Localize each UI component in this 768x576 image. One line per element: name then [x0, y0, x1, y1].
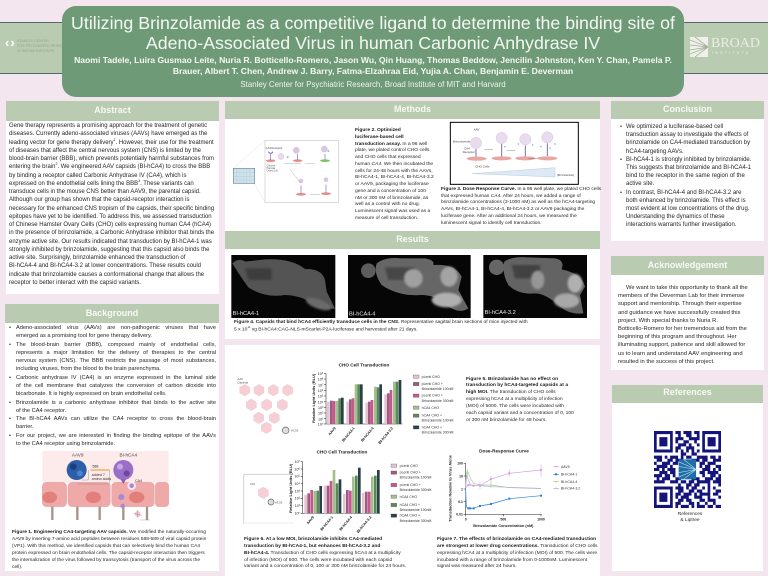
figure 6: capsid illustration and bar chart: 10⁷ — [295, 460, 301, 464]
brain BI-hCA4-1 — [231, 255, 335, 318]
category labels: BI-hCA4-4 — [339, 515, 354, 532]
figure 6: capsid illustration and bar chart: 10² — [295, 497, 301, 501]
heading: results: Results — [396, 234, 429, 244]
logo: Stanley Center: AT BROAD INSTITUTE — [17, 49, 55, 53]
figure 2 caption: Luminescent signal was used as a — [355, 209, 430, 214]
title: Adeno-Associated Virus in human Carbonic Anhydrase IV — [146, 33, 600, 53]
figure 3: dose response schematic — [450, 122, 578, 184]
legend: AAV9 — [561, 465, 570, 469]
legend: hCA4 CHO — [400, 495, 417, 499]
legend: pLenti CHO — [422, 375, 440, 379]
category labels: BI-hCA4-3.2 — [356, 515, 372, 534]
figure 5 caption: high MOI. The transduction of CHO cells — [466, 390, 556, 395]
logo: Broad Institute: BROAD — [711, 36, 760, 51]
figure 6: capsid illustration and bar chart: 10¹ — [295, 504, 301, 508]
series: BI-hCA4-3.2 — [466, 475, 541, 488]
axis — [301, 462, 380, 513]
figure 4 caption: Figure 4. Capsids that bind hCA4 efficiently transduce cells in the CNS. Representative sagittal brain sections of mice injected with — [234, 320, 528, 325]
abstract text: diseases. Currently adeno-associated viruses (AAVs) have emerged as the — [9, 131, 207, 137]
figure 5: capsid illustration and bar chart: 10⁶ — [318, 389, 324, 393]
figure 3 caption: luciferase gene. After an additional 24 hours, we measured the — [441, 214, 577, 219]
figure 1 caption: the internalization of the virus followed by transcytosis (transport of the virus across the — [12, 558, 200, 563]
peptide insertion label: 588 — [92, 465, 98, 469]
logo: Stanley Center — [5, 35, 70, 53]
title — [71, 13, 675, 53]
category labels: BI-hCA4-4 — [360, 426, 375, 443]
conclusion bullets: both enhanced by brinzolamide. This effect is — [626, 198, 746, 204]
figure 5: capsid illustration and bar chart: HCO5 — [291, 429, 299, 433]
references label: References — [678, 512, 702, 517]
background bullets: nervous system (CNS). The BBB restricts the passage of most substances, — [16, 358, 216, 364]
references label — [678, 512, 702, 523]
panel: results charts — [225, 345, 600, 576]
background bullets: Adeno-associated virus (AAVs) are non-pathogenic viruses that have — [16, 325, 216, 331]
conclusion bullets: brinzolamide on CA4-mediated transduction by — [626, 140, 750, 146]
authors: Brauer, Albert T. Chen, Andrew J. Barry, Fatma-Elzahraa Eid, Yujia A. Chan, Benjamin E. Deverman — [173, 66, 573, 76]
figure 5: capsid illustration and bar chart — [237, 362, 454, 445]
figure 1 caption: cell). — [12, 565, 22, 570]
category labels: AAV9 — [306, 515, 315, 525]
acknowledgement text — [618, 285, 748, 365]
background bullets: • — [9, 325, 11, 331]
heading: conclusion: Conclusion — [663, 104, 712, 114]
legend — [553, 465, 580, 491]
logo: Broad Institute — [690, 36, 760, 57]
panel: abstract — [6, 101, 219, 294]
legend: Brinzolamide 100nM — [422, 387, 454, 391]
axes — [464, 463, 542, 516]
category labels: BI-hCA4-1 — [341, 426, 356, 443]
figure 6: capsid illustration and bar chart — [244, 450, 432, 534]
legend: Brinzolamide 100nM — [400, 476, 432, 480]
axis — [324, 373, 402, 424]
panel: references — [612, 385, 763, 571]
figure 7: dose response chart: 1000 — [537, 518, 545, 522]
figure 3: dose response schematic: Brinzolamide — [453, 140, 471, 144]
vesicles and neuron: CA4 — [135, 479, 142, 483]
abstract text: necessary for the enhanced CNS tropism of the capsids, their specific binding — [9, 206, 214, 212]
heading: background — [5, 304, 219, 323]
panel: results top — [225, 231, 600, 339]
figure 2 caption: Figure 2. Optimized — [355, 128, 401, 133]
acknowledgement text: Botticello-Romero for her tremendous aid from the — [618, 326, 747, 332]
heading: methods: Methods — [394, 104, 431, 114]
figure 2 caption: BI-hCA4-1, BI-hCA4-4, BI-hCA4-3.2 — [355, 175, 434, 180]
legend: pLenti CHO + — [400, 483, 421, 487]
figure 5 caption — [466, 376, 574, 423]
legend: Brinzolamide 300nM — [422, 431, 454, 435]
acknowledgement text: us to learn and understand AAV engineering and — [618, 351, 743, 357]
figure 2 caption: cells for 24-48 hours with the AAVs, — [355, 168, 433, 174]
references label: & Liptree — [680, 518, 700, 523]
figure 2 caption: human CA4. We then incubated the — [355, 162, 433, 167]
endothelial cells — [42, 482, 169, 520]
peptide insertion label — [78, 465, 111, 484]
series: BI-hCA4-4 — [466, 469, 541, 489]
bars — [327, 380, 401, 424]
background bullets: represents a major limitation for the delivery of therapies to the central — [16, 350, 216, 356]
figure 7 caption: are strongest at lower drug concentrations. Transduction of CHO cells — [437, 544, 598, 549]
legend: hCA4 CHO + — [400, 503, 420, 507]
background bullets: The BI-hCA4 AAVs can utilize the CA4 receptor to cross the blood-brain — [16, 416, 216, 422]
figure 4 caption — [234, 320, 528, 333]
figure 7: dose response chart: 500 — [500, 518, 506, 522]
figure 5 caption: or 300 nM brinzolamide for 48 hours. — [466, 418, 547, 423]
figure 7 caption: Figure 7. The effects of brinzolamide on CA4-mediated transduction — [437, 537, 596, 542]
abstract text: transduce cells in the mouse CNS better than AAV9, the parental capsid. — [9, 189, 201, 195]
figure 5: capsid illustration and bar chart: 10⁸ — [318, 378, 324, 382]
figure 6: capsid illustration and bar chart: 10⁵ — [294, 475, 300, 479]
affiliation: Stanley Center for Psychiatric Research, Broad Institute of MIT and Harvard — [240, 80, 506, 89]
panel: conclusion — [611, 101, 764, 241]
figure 2 caption: well as a control with no drug. — [355, 202, 420, 207]
figure 3: dose response schematic: [Brinzolamide] — [557, 173, 574, 177]
figure 5: capsid illustration and bar chart: 10⁰ — [318, 422, 324, 426]
chart title: CHO Cell Transduction — [339, 362, 390, 367]
brain BI-hCA4-3.2 — [483, 255, 587, 318]
abstract text: Although our group has shown that the capsid-receptor interaction is — [9, 197, 190, 203]
figure 2 caption: nM or 300 nM of brinzolamide, as — [355, 196, 428, 200]
chart title: CHO Cell Transduction — [317, 450, 368, 455]
background bullets: bicarbonate. It is highly expressed on brain endothelial cells. — [16, 391, 167, 397]
capsid hexagons — [240, 384, 293, 434]
figure 5: capsid illustration and bar chart: 10³ — [318, 406, 324, 410]
figure 7 caption: signal was measured after 24 hours. — [437, 564, 517, 569]
peptide insertion label: amino acids — [92, 477, 111, 481]
legend: hCA4 CHO — [422, 406, 439, 410]
legend: pLenti CHO + — [422, 382, 443, 386]
capsid: BI-hCA4: BI-hCA4 — [120, 453, 138, 458]
figure 6 caption: transduction by BI-hCA4-1, but enhances BI-hCA4-3.2 and — [244, 544, 380, 549]
figure 2 caption: gene and a concentration of 100 — [355, 189, 426, 194]
figure 7 caption: incubated with a range of brinzolamide from 0-1000nM. Luminescent — [437, 558, 587, 563]
figure 5: capsid illustration and bar chart: Capsids — [237, 380, 249, 384]
figure 7 caption — [437, 536, 598, 569]
brain BI-hCA4-1: BI-hCA4-1 — [233, 311, 259, 317]
figure 5: capsid illustration and bar chart: 10¹ — [318, 417, 324, 421]
figure 5: capsid illustration and bar chart: 10⁷ — [318, 383, 324, 387]
figure 1 caption: (VP1). With this method, we identified capsids that can selectively bind the human CA4 — [12, 544, 200, 549]
brain BI-hCA4-4: BI-hCA4-4 — [349, 311, 375, 317]
background bullets: of the cell membrane that catalyzes the conversion of carbon dioxide into — [16, 383, 216, 389]
background bullets: Brinzolamide is a carbonic anhydrase inhibitor that binds to the active site — [16, 400, 216, 406]
logo: Stanley Center: STANLEY CENTER — [17, 39, 49, 43]
background bullets: • — [9, 400, 11, 406]
figure 1 caption: Figure 1. Engineering CA4-targeting AAV capsids. We modified the naturally-occurring — [12, 530, 206, 535]
figure 3 caption: AAVs, BI-hCA4-1, BI-hCA4-4, BI-hCA4-3.2 or AAV9 packaging the — [441, 207, 584, 212]
abstract text: enzyme active site. Our results indicated that transduction by BI-hCA4-1 was — [9, 238, 212, 244]
acknowledgement text: and guidance we have successfully created this — [618, 310, 740, 316]
figure 2: luciferase assay schematic: Hamster — [267, 167, 276, 170]
conclusion bullets: hCA4-targeting AAVs. — [626, 149, 684, 155]
conclusion bullets: BI-hCA4-1 is strongly inhibited by brinzolamide. — [626, 157, 751, 163]
figure 2: luciferase assay schematic: Chinese — [267, 165, 276, 167]
title: Utilizing Brinzolamide as a competitive ligand to determine the binding site of — [71, 13, 675, 33]
legend — [413, 375, 454, 435]
series: AAV9 — [466, 464, 542, 489]
abstract text: indicate that brinzolamide causes a conformational change that allows the — [9, 272, 204, 278]
acknowledgement text: support and mentorship. Through their expertise — [618, 301, 742, 307]
figure 5: capsid illustration and bar chart: Relative Light Units (RLU) — [311, 373, 316, 423]
figure 3 caption: luminescent signal to identify cell transduction. — [441, 221, 542, 226]
figure 7: dose response chart — [449, 448, 580, 528]
figure 5: capsid illustration and bar chart: 10⁵ — [318, 395, 324, 399]
acknowledgement text: members of the Deverman Lab for their immense — [618, 293, 744, 299]
figure 6: capsid illustration and bar chart: 10⁴ — [294, 482, 300, 486]
QR centre logo — [679, 459, 696, 479]
legend: Brinzolamide 300nM — [422, 399, 454, 403]
background bullets: • — [9, 342, 11, 348]
legend: pLenti CHO — [400, 464, 418, 468]
category labels: BI-hCA4-1 — [320, 515, 334, 532]
figure 6: capsid illustration and bar chart: 10³ — [295, 489, 301, 493]
conclusion bullets: This suggests that brinzolamide and BI-hCA4-1 — [626, 165, 751, 171]
figure 5 caption: transduction by hCA4-targeted capsids at a — [466, 383, 568, 388]
category labels: BI-hCA4-3.2 — [378, 426, 394, 445]
heading: results — [225, 231, 600, 249]
legend: Brinzolamide 300nM — [400, 488, 432, 492]
logo: Stanley Center: FOR PSYCHIATRIC RESEARCH — [17, 44, 70, 48]
brain BI-hCA4-3.2: BI-hCA4-3.2 — [485, 310, 516, 316]
conclusion bullets: We optimized a luciferase-based cell — [626, 124, 723, 130]
figure 5 caption: each capsid variant and a concentration of 0, 100 — [466, 411, 574, 416]
figure 5: capsid illustration and bar chart: AAV — [237, 377, 243, 381]
title banner — [62, 6, 684, 97]
background bullets: to the CA4 receptor using brinzolamide. — [16, 441, 115, 447]
heading: conclusion — [611, 101, 764, 119]
background bullets — [9, 325, 216, 447]
well illustration — [244, 474, 293, 523]
category labels: AAV9 — [328, 426, 337, 436]
figure 5: capsid illustration and bar chart: 10⁴ — [318, 400, 324, 404]
figure 7: dose response chart: 1 — [461, 487, 463, 491]
conclusion bullets: Understanding the dynamics of these — [626, 214, 725, 220]
figure 5 caption: expressing hCA4 at a multiplicity of infection — [466, 397, 563, 402]
abstract text: of diseases that affect the central nervous system (CNS) is limited by the — [9, 148, 201, 154]
figure 1 caption — [12, 530, 206, 570]
legend: hCA4 CHO + — [400, 514, 420, 518]
authors — [74, 55, 672, 76]
legend: BI-hCA4-3.2 — [561, 487, 580, 491]
acknowledgement text: beginning of this program and throughout. Her — [618, 334, 737, 340]
figure 1: capsid diagram — [42, 451, 169, 520]
background bullets: barrier. — [16, 424, 34, 430]
acknowledgement text: We want to take this opportunity to thank all the — [626, 285, 748, 291]
figure 7: dose response chart: 100 — [457, 462, 463, 466]
figure 2 caption — [355, 128, 434, 221]
legend: pLenti CHO + — [422, 394, 443, 398]
conclusion bullets — [626, 124, 751, 228]
abstract text: receptor to better interact with the capsid variants. — [9, 280, 141, 286]
panel: conclusion: • — [620, 190, 622, 196]
abstract text: in the presence of brinzolamide, a Carbonic Anhydrase inhibitor that binds the — [9, 230, 214, 236]
abstract text: leading vector for gene therapy delivery1. However, their use for the treatment — [9, 138, 214, 146]
logo: Stanley Center: ‹› — [5, 35, 16, 50]
figure 3 caption: brinzolamide concentrations (3-1000 nM) as well as the hCA4-targeting — [441, 200, 595, 205]
figure 7: dose response chart: Brinzolamide Concentration (nM) — [473, 524, 534, 528]
abstract text: epitopes have yet to be identified. To address this, we assessed transduction — [9, 214, 212, 220]
background bullets: of the CA4 receptor. — [16, 408, 66, 414]
panel: conclusion: • — [620, 157, 622, 163]
figure 6: capsid illustration and bar chart: Relative Light Units (RLU) — [288, 463, 293, 513]
background bullets: • — [9, 433, 11, 439]
figure 7: dose response chart: 0 — [465, 518, 467, 522]
panel: background — [5, 304, 219, 571]
panel: acknowledgement — [611, 256, 764, 370]
legend: BI-hCA4-4 — [561, 480, 577, 484]
legend: hCA4 CHO + — [422, 414, 442, 418]
background bullets: The blood-brain barrier (BBB), composed mainly of endothelial cells, — [16, 342, 216, 348]
figure 4 caption: 5 x 1011 vg BI-hCA4:CAG-NLS-mScarlet-P2A-luciferase and harvested after 21 days. — [234, 325, 418, 333]
category labels — [328, 426, 394, 445]
heading: references: References — [663, 387, 712, 397]
legend: BI-hCA4-1 — [561, 473, 577, 477]
figure 3: dose response schematic: AAV — [474, 128, 479, 132]
heading: abstract — [6, 101, 219, 121]
figure 6 caption: of infection (MOI) of 500. The cells were incubated with each capsid — [244, 558, 392, 563]
abstract text: Gene therapy represents a promising approach for the treatment of genetic — [9, 123, 207, 129]
bars — [304, 468, 380, 513]
legend: pLenti CHO + — [400, 471, 421, 475]
figure 2 caption: plate, we plated control CHO cells — [355, 148, 429, 153]
well illustration: AAV — [250, 482, 255, 486]
conclusion bullets: interactions warrants further investigation. — [626, 222, 736, 228]
figure 6 caption: Figure 6. At a low MOI, brinzolamide inhibits CA4-mediated — [244, 537, 382, 542]
series: BI-hCA4-1 — [466, 488, 542, 509]
legend — [391, 464, 432, 523]
abstract text — [9, 122, 214, 286]
figure 2 caption: measure of cell transduction. — [355, 216, 418, 221]
legend: Brinzolamide 100nM — [400, 508, 432, 512]
abstract text: BI-hCA4-4 and BI-hCA4-3.2 at lower concentrations. These results could — [9, 263, 201, 269]
figure 5: capsid illustration and bar chart: 10² — [318, 412, 324, 416]
conclusion bullets: active site. — [626, 181, 654, 187]
abstract text: blood-brain barrier (BBB), which prevents potentially harmful substances from — [9, 156, 214, 162]
figure 5 caption: Figure 5. Brinzolamide has no effect on — [466, 376, 558, 382]
figure 2: luciferase assay schematic — [233, 140, 338, 202]
figure 6: capsid illustration and bar chart: 10⁰ — [294, 512, 301, 516]
figure 4: brain sections — [231, 255, 587, 318]
figure 7 caption: expressing hCA4 at a multiplicity of infection (MOI) of 500. The cells were — [437, 551, 597, 556]
figure 6 caption: variant and a concentration of 0, 100 or 300 nM brinzolamide for 24 hours. — [244, 564, 406, 569]
figure 5: capsid illustration and bar chart: 10⁹ — [318, 372, 324, 376]
background bullets: emerged as a promising tool for gene therapy delivery. — [16, 333, 152, 339]
chart title: Dose-Response Curve — [479, 448, 529, 453]
legend: Brinzolamide 300nM — [400, 519, 432, 523]
figure 3 caption — [441, 186, 601, 226]
abstract text: of Chinese Hamster Ovary Cells (CHO) cells expressing human CA4 (hCA4) — [9, 222, 211, 228]
abstract text: active site. Surprisingly, brinzolamide enhanced the transduction of — [9, 255, 185, 261]
figure 1 caption: protein expressed on brain endothelial cells. The capsid-receptor interaction then triggers — [12, 551, 205, 556]
heading: background: Background — [86, 308, 138, 318]
figure 7: dose response chart: 10 — [459, 474, 463, 478]
heading: abstract: Abstract — [94, 105, 131, 115]
background bullets: • — [9, 375, 11, 381]
logo: Broad Institute: INSTITUTE — [712, 51, 751, 55]
panel: conclusion: • — [620, 124, 622, 130]
acknowledgement text: project. With special thanks to Nuria R. — [618, 318, 718, 324]
legend: hCA4 CHO + — [422, 425, 442, 429]
abstract text: entering the brain2. We engineered AAV capsids (BI-hCA4) to cross the BBB — [9, 162, 210, 170]
figure 2 caption: luciferase-based cell — [355, 135, 404, 140]
figure 3: dose response schematic: CHO Cells — [475, 164, 490, 168]
figure 3: dose response schematic: CA4 — [464, 146, 470, 150]
background bullets: • — [9, 416, 11, 422]
figure 2: luciferase assay schematic: CA4 Receptor — [266, 146, 282, 150]
heading: acknowledgement: Acknowledgement — [648, 260, 727, 270]
category labels — [306, 515, 372, 534]
figure 7: dose response chart: 0.01 — [456, 513, 463, 517]
conclusion bullets: In contrast, BI-hCA4-4 and BI-hCA4-3.2 are — [626, 190, 741, 196]
figure 2 caption: or AAV9, packaging the luciferase — [355, 182, 429, 187]
figure 3 caption: Figure 3. Dose Response Curve. In a 96 well plate, we plated CHO cells — [441, 187, 601, 192]
heading: methods — [225, 101, 600, 119]
figure 7: dose response chart: 0.1 — [458, 500, 463, 504]
figure 6 caption — [244, 536, 406, 569]
legend: Brinzolamide 100nM — [422, 419, 454, 423]
heading: references — [612, 385, 763, 403]
abstract text: expressed on the endothelial cells lining the BBB3. These variants can — [9, 179, 194, 187]
well illustration: HCO5 — [275, 500, 283, 504]
acknowledgement text: resulted in the success of this project. — [618, 359, 715, 365]
figure 6: capsid illustration and bar chart: 10⁶ — [294, 467, 300, 471]
figure 2 caption: transduction assay. In a 96 well — [355, 142, 427, 146]
abstract text: by binding a receptor called Carbonic Anhydrase IV (CA4), which is — [9, 172, 186, 178]
conclusion bullets: most evident at low concentrations of the drug. — [626, 206, 749, 212]
figure 7: dose response chart: Transduction Relative to Virus Alone — [449, 455, 453, 522]
background bullets: For our project, we are interested in finding the binding epitope of the AAVs — [16, 433, 216, 439]
figure 2: luciferase assay schematic: Ovary Cell — [267, 170, 278, 173]
QR code — [654, 431, 721, 508]
figure 1 caption: AAV9 by inserting 7-amino acid peptides between residues 588-589 of viral capsid protein — [12, 537, 206, 542]
figure 5 caption: (MOI) of 5000. The cells were incubated with — [466, 404, 564, 409]
conclusion bullets: transduction assay to investigate the effects of — [626, 132, 748, 138]
heading: acknowledgement — [611, 256, 764, 275]
acknowledgement text: illuminating support, patience and skill allowed for — [618, 342, 745, 348]
header band — [0, 22, 768, 74]
figure 3 caption: that expressed human CA4. After 24 hours, we added a range of — [441, 194, 581, 199]
background bullets: Carbonic anhydrase IV (CA4) is an enzyme expressed in the luminal side — [16, 375, 216, 381]
peptide insertion label: added 7 — [92, 473, 105, 477]
capsid: AAV9: AAV9 — [72, 453, 84, 458]
authors: Naomi Tadele, Luira Gusmao Leite, Nuria R. Botticello-Romero, Jason Wu, Qin Huang, Thomas Beddow, Jencilin Johnston, Ken Y. Chan, Pamela P. — [74, 55, 672, 65]
figure 6 caption: BI-hCA4-4. Transduction of CHO cells expressing hCA4 at a multiplicity — [244, 551, 401, 556]
background bullets: including viruses, from the blood to the brain parenchyma. — [16, 366, 161, 372]
figure 3: dose response schematic: Receptor — [463, 150, 475, 154]
conclusion bullets: bind to the receptor in the same region of the — [626, 173, 745, 179]
brain BI-hCA4-4 — [348, 255, 471, 318]
figure 2 caption: and CHO cells that expressed — [355, 155, 421, 160]
abstract text: strongly inhibited by brinzolamide, suggesting that this capsid also binds the — [9, 247, 209, 253]
panel: methods — [225, 101, 600, 231]
